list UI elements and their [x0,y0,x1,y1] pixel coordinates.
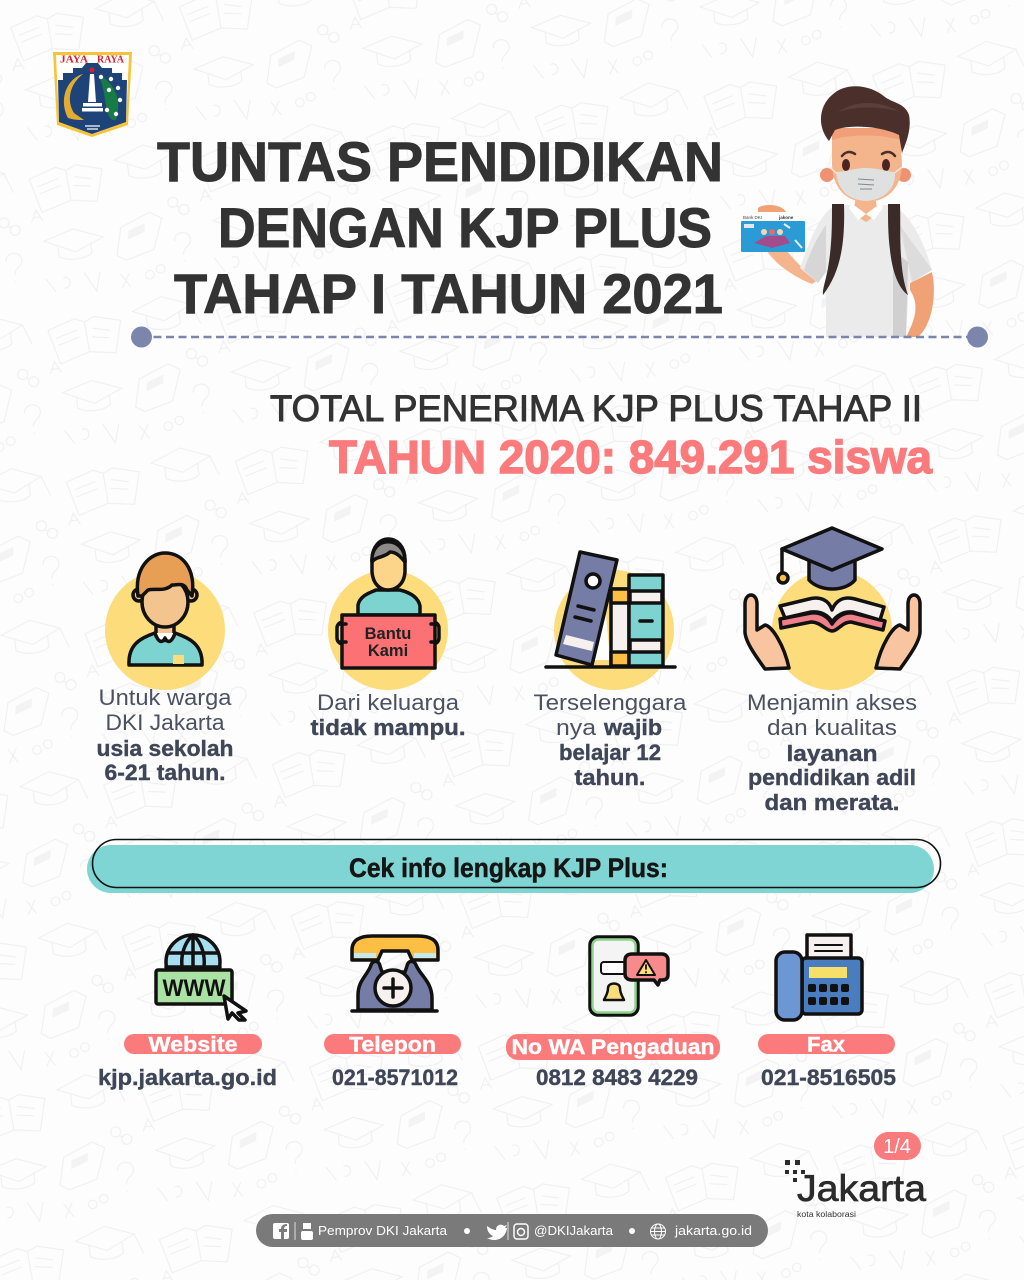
subheading: total recipients: TAHUN 2020: 849.291 siswa [329,431,932,483]
panel: whatsapp contact [506,937,720,1090]
label pill: website: Website [148,1034,238,1056]
text: age criterion: Untuk warga [98,685,232,710]
subheading: total recipients: TOTAL PENERIMA KJP PLUS TAHAP II [270,388,922,429]
icon: person with sign [337,539,439,668]
icon: instagram [514,1224,528,1239]
text: age criterion: usia sekolah [96,736,234,761]
text: family criterion [310,690,466,740]
kjp card: Bank DKI [743,215,762,220]
text: study criterion: Terselenggara [534,690,687,715]
icon: graduation cap, book and hands [745,528,920,669]
text: study criterion: nya [556,715,597,740]
panel: criterion age [96,553,234,785]
icon: rotary telephone [352,936,438,1011]
icon: phone with alert [590,937,668,1015]
banner: check full info [87,840,940,893]
label pill: website [124,1034,262,1056]
label pill: telepon [324,1034,461,1056]
panel: website contact [98,935,277,1090]
text: age criterion: 6-21 tahun. [104,760,226,785]
footer: social media bar [256,1214,768,1247]
logo: Jakarta kota kolaborasi: Jakarta [797,1168,926,1209]
logo: Jakarta kota kolaborasi: kota kolaborasi [797,1210,856,1219]
text: access criterion: dan merata. [764,790,900,815]
title [157,130,723,325]
panel: criterion education access [745,528,920,815]
text: access criterion: pendidikan adil [748,765,916,790]
divider: dashed timeline with end dots [131,326,988,348]
label pill: no wa pengaduan: No WA Pengaduan [512,1036,714,1059]
label pill: fax [758,1034,895,1056]
panel: criterion family [310,539,466,740]
kjp card [741,212,805,252]
text: access criterion [747,690,917,815]
text: age criterion [96,685,234,785]
value: telephone number: 021-8571012 [332,1065,458,1090]
logo: Jakarta coat of arms: RAYA [97,54,125,66]
text: family criterion: Dari keluarga [317,690,460,715]
icon: books [546,552,675,667]
panel: criterion family: Kami [368,642,408,660]
page badge: 1/4 [883,1136,911,1158]
panel: fax contact [758,935,896,1090]
panel: website contact: WWW [162,975,226,1002]
title: DENGAN KJP PLUS [218,196,712,259]
logo: Jakarta coat of arms: JAYA [60,54,89,66]
text: age criterion: DKI Jakarta [106,710,225,735]
page badge [874,1132,921,1160]
title: TAHAP I TAHUN 2021 [174,262,723,325]
text: family criterion: tidak mampu. [310,715,466,740]
text: study criterion: belajar 12 [559,740,661,765]
text: access criterion: layanan [786,741,878,766]
illustration: student holding KJP card [741,86,934,337]
text: study criterion: wajib [603,715,662,740]
footer: social media bar: jakarta.go.id [674,1224,752,1238]
logo: Jakarta kota kolaborasi [785,1160,926,1219]
logo: Jakarta coat of arms [53,52,132,137]
icon: globe [650,1224,666,1239]
label pill: fax: Fax [807,1034,845,1056]
text: access criterion: dan kualitas [767,715,897,740]
footer: social media bar: Pemprov DKI Jakarta [318,1224,447,1238]
value: whatsapp number: 0812 8483 4229 [536,1065,698,1090]
text: access criterion: Menjamin akses [747,690,917,715]
icon: www globe [156,935,246,1020]
value: fax number: 021-8516505 [761,1065,896,1090]
label pill: telepon: Telepon [349,1034,436,1056]
icon: twitter [487,1225,507,1240]
icon: fax machine [776,935,862,1020]
kjp card: jakone [778,215,794,220]
text: study criterion [534,690,687,790]
subheading: total recipients [270,388,932,483]
text: study criterion: tahun. [574,765,646,790]
icon: student [129,553,202,665]
value: website address: kjp.jakarta.go.id [98,1065,277,1090]
icon: facebook [273,1223,289,1239]
panel: phone contact [324,936,461,1090]
panel: criterion family: Bantu [365,625,411,643]
footer: social media bar: @DKIJakarta [534,1224,613,1238]
icon: youtube [301,1223,313,1240]
title: TUNTAS PENDIDIKAN [157,130,723,193]
banner: check full info: Cek info lengkap KJP Plus: [349,853,668,883]
panel: criterion 12 years study [534,552,687,790]
